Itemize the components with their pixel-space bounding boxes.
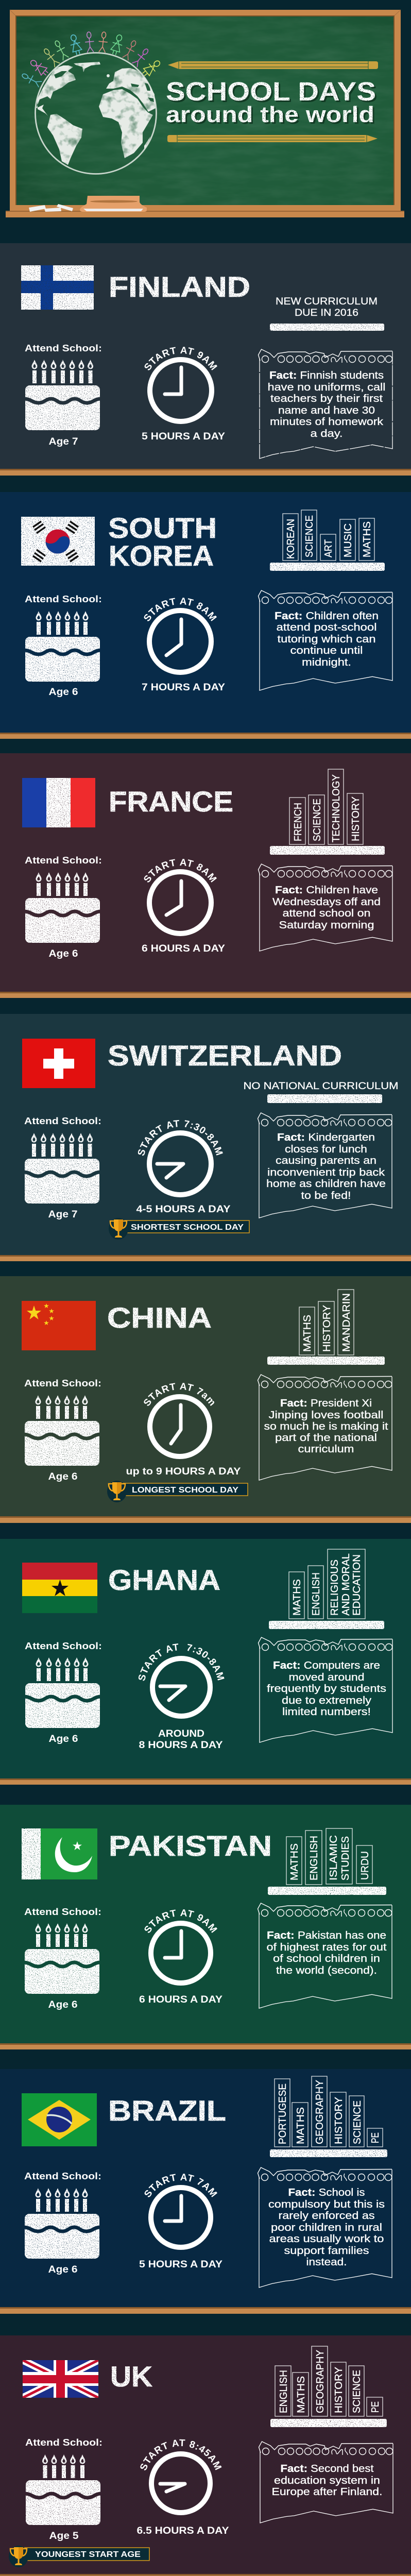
fact note: midnight. (302, 657, 351, 668)
subject books (289, 769, 363, 844)
subject books (275, 2076, 383, 2147)
fact note: a day. (310, 428, 343, 439)
clock (149, 611, 211, 672)
subject books: ART (323, 539, 334, 557)
rail (0, 1255, 411, 1261)
green board surface (16, 16, 393, 205)
country name: BRAZIL (108, 2094, 226, 2127)
shelf (270, 2149, 387, 2157)
curriculum note: NO NATIONAL CURRICULUM (243, 1081, 399, 1092)
fact note: Fact: Children often (275, 611, 379, 622)
subject books (299, 1290, 354, 1355)
start time: START AT 7:30-8AM (138, 1120, 223, 1156)
shelf (270, 563, 385, 571)
panel: Brazil (0, 2069, 411, 2314)
fact note: part of the national (275, 1432, 377, 1444)
attend label: Attend School: (24, 1907, 101, 1917)
rail (0, 469, 411, 476)
fact note (259, 2442, 393, 2523)
rail (0, 2043, 411, 2049)
attend label: Attend School: (25, 594, 102, 604)
fact note: rarely enforced as (278, 2210, 375, 2222)
rail (0, 1516, 411, 1523)
fact note: compulsory but this is (268, 2199, 385, 2210)
clock (150, 360, 212, 421)
country name: GHANA (108, 1564, 220, 1596)
subject books (289, 1549, 365, 1619)
subject books: HISTORY (321, 1305, 333, 1352)
fact note: Fact: Computers are (273, 1660, 380, 1671)
subject books: MATHS (362, 521, 373, 557)
fact note (258, 2167, 392, 2287)
fact note: attend post-school (276, 622, 377, 633)
subject books: MUSIC (342, 523, 354, 557)
icon: birthday cake (24, 360, 101, 430)
clock (151, 1923, 211, 1983)
start time: START AT 7:30-8AM (138, 1643, 225, 1681)
age: Age 6 (48, 687, 78, 698)
award: longest school day: LONGEST SCHOOL DAY (132, 1486, 238, 1495)
subject books: MATHS (289, 1843, 300, 1880)
curriculum note: NEW CURRICULUM (276, 296, 378, 307)
subject books: SCIENCE (352, 2100, 363, 2144)
panel: South Korea (0, 492, 411, 739)
flag: Pakistan (22, 1828, 97, 1879)
panel: Finland (0, 243, 411, 476)
hours: 6 HOURS A DAY (139, 1994, 222, 2005)
attend label: Attend School: (25, 343, 102, 353)
subject books (283, 510, 374, 561)
age: Age 5 (49, 2531, 79, 2541)
panel: Ghana (0, 1539, 411, 1785)
fact note: home as children have (266, 1178, 386, 1190)
title (166, 77, 378, 129)
fact note (259, 1637, 392, 1742)
fact note: due to extremely (282, 1695, 371, 1706)
icon: birthday cake (24, 1133, 100, 1204)
fact note: limited numbers! (282, 1706, 371, 1718)
fact note: inconvenient trip back (267, 1167, 385, 1178)
fact note: Saturday morning (279, 920, 374, 931)
rail (0, 733, 411, 739)
panel: UK (0, 2335, 411, 2576)
rail (0, 992, 411, 998)
subject books: ENGLISH (309, 1836, 320, 1880)
fact note: the world (second). (276, 1965, 377, 1976)
flag: France (22, 778, 95, 827)
icon: birthday cake (25, 2454, 101, 2525)
start time: START AT 8:45AM (140, 2439, 221, 2470)
panel: Pakistan (0, 1805, 411, 2049)
hours: up to 9 HOURS A DAY (126, 1466, 241, 1477)
fact note: to be fed! (301, 1190, 351, 1201)
fact note: teachers by their first (270, 393, 383, 404)
title: around the world (166, 102, 374, 127)
top pencil (168, 61, 378, 69)
fact note: have no uniforms, call (268, 382, 385, 393)
age: Age 6 (48, 1471, 77, 1482)
fact note: Fact: Kindergarten (277, 1132, 375, 1143)
flag: Brazil (22, 2093, 97, 2146)
country name: FINLAND (109, 270, 250, 303)
subject books: MATHS (292, 1579, 303, 1616)
start time: START AT 9AM (144, 347, 217, 370)
fact note: minutes of homework (270, 416, 384, 428)
subject books: FRENCH (293, 803, 304, 841)
rail (0, 1778, 411, 1785)
country name: SWITZERLAND (108, 1039, 342, 1072)
country name: FRANCE (109, 785, 233, 818)
fact note: Fact: School is (288, 2187, 365, 2198)
shelf (267, 1094, 382, 1103)
fact note: poor children in rural (271, 2222, 382, 2233)
hours: 8 HOURS A DAY (139, 1740, 223, 1751)
flag: Ghana (22, 1563, 97, 1613)
country name: CHINA (107, 1301, 212, 1334)
bottom pencil (167, 135, 378, 142)
fact note: of school children in (273, 1953, 380, 1964)
fact note: so much he is making it (264, 1421, 388, 1432)
flag: Switzerland (22, 1039, 95, 1088)
subject books: ENGLISH (278, 2370, 289, 2413)
age: Age 6 (48, 1734, 78, 1744)
subject books: GEOGRAPHY (315, 2350, 326, 2413)
hours: 6.5 HOURS A DAY (137, 2526, 229, 2536)
subject books: RELIGIOUS (329, 1560, 340, 1616)
fact note: attend school on (282, 908, 371, 919)
curriculum note (276, 296, 378, 318)
icon: birthday cake (24, 872, 101, 943)
clock (152, 1658, 210, 1716)
age: Age 6 (48, 948, 78, 959)
clock (150, 1397, 210, 1456)
attend label: Attend School: (24, 1378, 101, 1388)
fact note: Fact: Children have (275, 885, 378, 896)
shelf (270, 846, 385, 855)
hours: AROUND (158, 1728, 204, 1739)
subject books (275, 2346, 383, 2416)
attend label: Attend School: (24, 1116, 101, 1126)
subject books: GEOGRAPHY (314, 2080, 326, 2144)
attend label: Attend School: (24, 2171, 101, 2181)
shelf (270, 324, 384, 331)
hours: 7 HOURS A DAY (142, 682, 225, 693)
board frame (6, 10, 404, 217)
header: chalkboard (6, 10, 404, 217)
subject books: ENGLISH (311, 1572, 322, 1616)
start time: START AT 7am (144, 1383, 214, 1406)
attend label: Attend School: (25, 855, 102, 866)
flag: South Korea (21, 517, 95, 566)
country name: KOREA (109, 539, 214, 572)
age: Age 7 (48, 1209, 77, 1220)
subject books: PE (370, 2132, 381, 2143)
subject books: HISTORY (350, 796, 362, 841)
award: shortest school day: SHORTEST SCHOOL DAY (131, 1223, 244, 1232)
fact note: moved around (288, 1672, 365, 1683)
icon: birthday cake (24, 1657, 101, 1728)
fact note (259, 864, 392, 951)
age: Age 7 (48, 436, 78, 447)
curriculum note: DUE IN 2016 (295, 308, 358, 318)
age: Age 6 (48, 2264, 77, 2275)
clock (149, 1133, 211, 1195)
fact note: Jinping loves football (269, 1410, 383, 1421)
age: Age 6 (48, 1999, 77, 2010)
fact note (259, 590, 392, 690)
subject books: MANDARIN (341, 1293, 352, 1352)
subject books: MATHS (296, 2376, 307, 2413)
panel: France (0, 753, 411, 998)
start time: START AT 8AM (144, 598, 217, 621)
flag: Finland (21, 265, 94, 310)
eraser (80, 196, 147, 212)
subject books: HISTORY (333, 2097, 345, 2144)
flag: China (22, 1301, 96, 1350)
title: around the world (167, 104, 376, 129)
shelf (269, 1621, 384, 1629)
start time: START AT 7AM (144, 2174, 217, 2197)
subject books: AND MORAL (340, 1553, 352, 1616)
subject books: TECHNOLOGY (331, 774, 342, 842)
country name: PAKISTAN (109, 1829, 272, 1862)
fact note: instead. (306, 2257, 347, 2268)
fact note: of highest rates for out (267, 1942, 387, 1953)
hours: 4-5 HOURS A DAY (136, 1204, 231, 1215)
subject books: MATHS (295, 2107, 306, 2144)
subject books (286, 1828, 372, 1885)
clock (151, 2454, 210, 2513)
subject books: PORTUGESE (277, 2083, 288, 2144)
shelf (270, 2419, 387, 2427)
fact note: causing parents an (276, 1155, 376, 1166)
shelf (268, 1887, 386, 1895)
hours: 5 HOURS A DAY (139, 2259, 222, 2270)
fact note: continue until (290, 645, 363, 656)
title: SCHOOL DAYS (166, 77, 376, 106)
start time: START AT 9AM (144, 1909, 217, 1933)
fact note: name and have 30 (278, 405, 375, 416)
subject books: URDU (359, 1851, 371, 1880)
fact note: support families (284, 2245, 369, 2257)
attend label: Attend School: (25, 2437, 102, 2448)
fact note: tutoring which can (277, 634, 376, 645)
icon: birthday cake (24, 1923, 100, 1994)
award: youngest start age: YOUNGEST START AGE (35, 2550, 141, 2559)
clock (149, 872, 211, 934)
chalk sticks (29, 204, 73, 212)
subject books: HISTORY (333, 2367, 345, 2413)
hours: 5 HOURS A DAY (142, 431, 225, 442)
fact note: Wednesdays off and (272, 896, 381, 908)
icon: birthday cake (24, 611, 101, 682)
hours (139, 1728, 223, 1751)
fact note: Fact: Finnish students (269, 370, 384, 381)
subject books: SCIENCE (304, 515, 315, 557)
subject books: PE (370, 2401, 381, 2413)
fact note: Fact: Pakistan has one (267, 1930, 386, 1941)
fact note: areas usually work to (269, 2233, 384, 2245)
panel: China (0, 1276, 411, 1523)
country name: SOUTH (108, 512, 217, 544)
award: youngest start age (9, 2546, 149, 2567)
hours: 6 HOURS A DAY (142, 943, 225, 954)
fact note (258, 1375, 392, 1480)
title: SCHOOL DAYS (167, 78, 378, 108)
subject books: MATHS (302, 1315, 313, 1352)
fact note: Europe after Finland. (272, 2486, 382, 2498)
subject books: SCIENCE (312, 799, 323, 841)
subject books: EDUCATION (351, 1554, 363, 1616)
start time: START AT 8AM (144, 859, 217, 883)
chalk children around globe (21, 31, 162, 88)
fact note: frequently by students (267, 1683, 386, 1694)
country name: UK (110, 2360, 152, 2393)
subject books: STUDIES (340, 1836, 351, 1880)
country name (108, 512, 217, 572)
fact note: education system in (274, 2475, 380, 2486)
subject books: SCIENCE (351, 2370, 363, 2413)
subject books: KOREAN (285, 519, 297, 559)
fact note (258, 1113, 392, 1218)
clock (151, 2188, 211, 2247)
fact note (259, 349, 392, 459)
award: longest school day (107, 1481, 248, 1502)
fact note: closes for lunch (285, 1144, 367, 1155)
icon: birthday cake (24, 2188, 100, 2259)
fact note: Fact: Second best (280, 2463, 374, 2475)
fact note (258, 1903, 392, 2008)
rail (0, 2307, 411, 2314)
award: shortest school day (109, 1218, 249, 1240)
chalk globe (35, 53, 157, 174)
shelf (267, 1357, 385, 1365)
flag: UK (23, 2360, 98, 2398)
fact note: Fact: President Xi (280, 1398, 372, 1409)
icon: birthday cake (24, 1395, 100, 1466)
panel: Switzerland (0, 1014, 411, 1261)
fact note: curriculum (298, 1444, 354, 1455)
subject books: ISLAMIC (328, 1835, 339, 1880)
rail (0, 2574, 411, 2576)
attend label: Attend School: (25, 1641, 102, 1651)
